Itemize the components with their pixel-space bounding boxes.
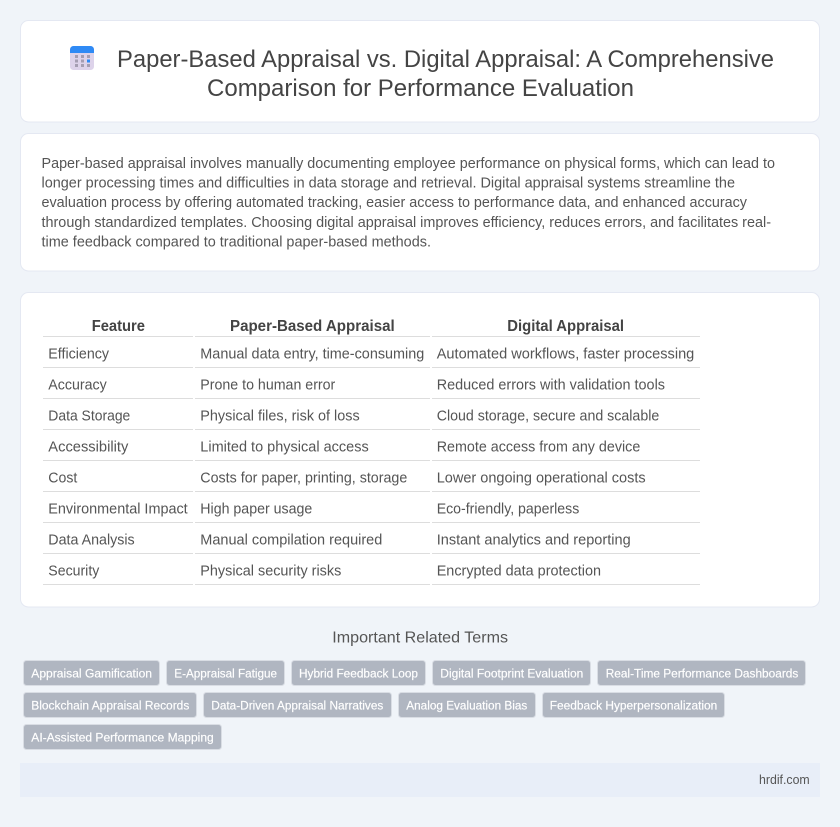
title: Paper-Based Appraisal vs. Digital Appraisal: A Comprehensive [117,46,774,73]
table row: Accuracy [43,377,700,399]
panel: comparison table [20,292,820,607]
table row: Data Analysis: Manual compilation required [200,532,382,548]
table row: Data Storage: Data Storage [48,408,130,424]
table row: Cost: Costs for paper, printing, storage [200,470,407,486]
tag: Real-Time Performance Dashboards: Real-Time Performance Dashboards [606,666,798,680]
text block: summary paragraph: longer processing times and difficulties in data storage and retrieval. Digital appraisal systems streamline the [42,176,735,192]
table row: Data Storage: Physical files, risk of loss [200,408,360,424]
tag: Digital Footprint Evaluation: Digital Footprint Evaluation [440,666,583,680]
tag: Data-Driven Appraisal Narratives [204,692,392,718]
table row: Accuracy: Prone to human error [200,377,335,393]
tag: Analog Evaluation Bias: Analog Evaluation Bias [406,698,527,712]
tag: Digital Footprint Evaluation [432,660,590,686]
text block: summary paragraph [42,156,775,250]
table row: Accessibility: Remote access from any device [437,439,640,455]
table row: Cost: Cost [48,470,77,486]
title [117,46,774,102]
table header: Digital Appraisal [507,318,624,335]
tag: E-Appraisal Fatigue: E-Appraisal Fatigue [174,666,277,680]
tag: AI-Assisted Performance Mapping [24,724,222,750]
table row: Efficiency [43,346,700,368]
table row: Environmental Impact: Eco-friendly, paperless [437,501,579,517]
table row: Security: Security [48,563,100,579]
tag: AI-Assisted Performance Mapping: AI-Assisted Performance Mapping [31,730,214,744]
tag: Appraisal Gamification [24,660,160,686]
panel: summary [20,134,820,271]
table header: Paper-Based Appraisal [230,318,395,335]
icon: calendar [70,46,94,70]
heading: related terms: Important Related Terms [332,630,508,647]
table row: Environmental Impact: Environmental Impact [48,501,188,517]
text block: summary paragraph: Paper-based appraisal involves manually documenting employee performance on physical forms, which can lead to [42,156,775,172]
table row: Data Analysis: Data Analysis [48,532,135,548]
table row: Data Analysis [43,532,700,554]
title: Comparison for Performance Evaluation [207,75,634,102]
table row: Data Storage: Cloud storage, secure and scalable [437,408,659,424]
table row: Accessibility: Accessibility [48,439,129,455]
table row: Cost [43,470,700,492]
table row: Security: Encrypted data protection [437,563,601,579]
tag: Data-Driven Appraisal Narratives: Data-Driven Appraisal Narratives [211,698,383,712]
table header: Feature [92,318,145,335]
table row: Efficiency: Efficiency [48,346,110,362]
table row: Accessibility [43,439,700,461]
tag: Feedback Hyperpersonalization: Feedback Hyperpersonalization [550,698,717,712]
table row: Data Analysis: Instant analytics and reporting [437,532,631,548]
tag: Hybrid Feedback Loop [292,660,426,686]
table row: Efficiency: Manual data entry, time-consuming [200,346,424,362]
table row: Accessibility: Limited to physical access [200,439,369,455]
tag: Blockchain Appraisal Records [24,692,196,718]
tag: Hybrid Feedback Loop: Hybrid Feedback Loop [299,666,418,680]
table row: Security [43,563,700,585]
tag: Feedback Hyperpersonalization [542,692,724,718]
footer [20,763,820,797]
table row: Environmental Impact: High paper usage [200,501,312,517]
text block: summary paragraph: through standardized templates. Choosing digital appraisal improves efficiency, reduces errors, and facilitates real- [42,215,771,231]
table header [43,318,700,337]
footer source text: hrdif.com [759,772,810,787]
table row: Environmental Impact [43,501,700,523]
tag: E-Appraisal Fatigue [166,660,284,686]
table row: Accuracy: Accuracy [48,377,107,393]
table row: Security: Physical security risks [200,563,341,579]
tag: Analog Evaluation Bias [398,692,536,718]
tag: Appraisal Gamification: Appraisal Gamification [31,666,152,680]
text block: summary paragraph: time feedback compared to traditional paper-based methods. [42,234,431,250]
table row: Efficiency: Automated workflows, faster processing [437,346,694,362]
table row: Cost: Lower ongoing operational costs [437,470,646,486]
panel: header [20,20,820,122]
table row: Data Storage [43,408,700,430]
tag: Blockchain Appraisal Records: Blockchain Appraisal Records [31,698,189,712]
related term tags [24,660,806,750]
tag: Real-Time Performance Dashboards [598,660,806,686]
table row: Accuracy: Reduced errors with validation tools [437,377,665,393]
text block: summary paragraph: evaluation process by offering automated tracking, easier access to performance data, and enhanced accuracy [42,195,748,211]
